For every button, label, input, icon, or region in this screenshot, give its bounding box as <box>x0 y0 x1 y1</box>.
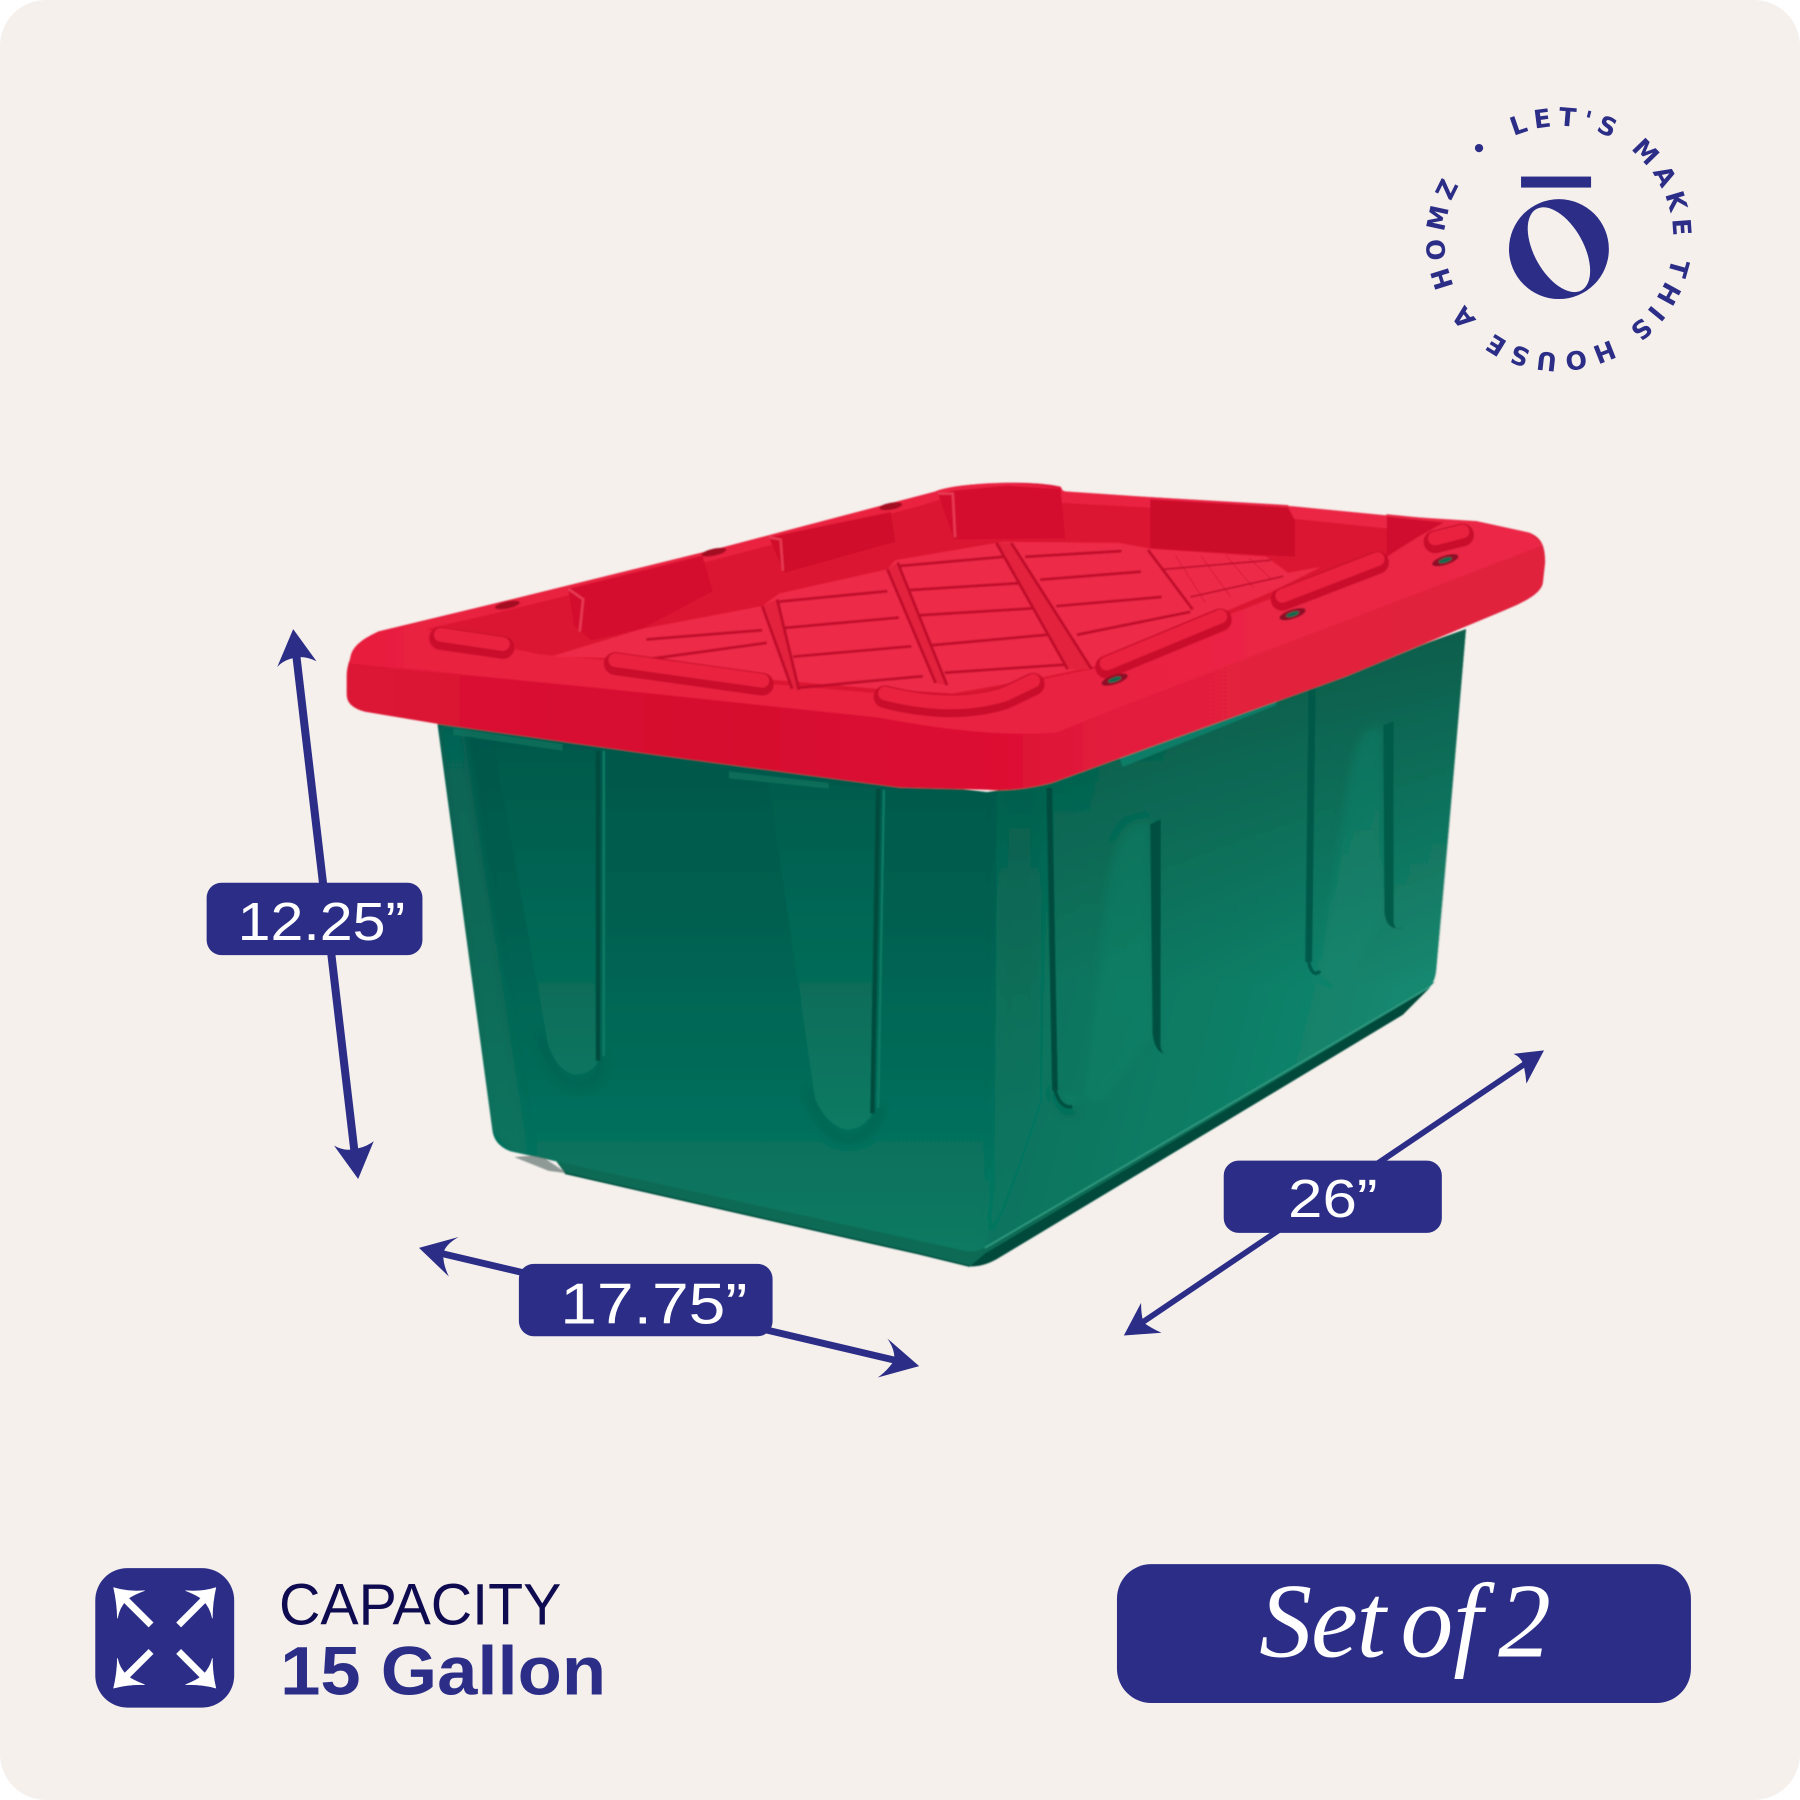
lid rim holes <box>494 501 1460 688</box>
height arrow <box>277 629 374 1179</box>
badge: set of 2: Set <box>1259 1563 1389 1680</box>
lid handles <box>441 532 1463 706</box>
rib: right face 2 <box>1320 726 1383 987</box>
badge: set of 2 <box>1117 1563 1691 1703</box>
logo mark: o with macron <box>1509 177 1609 302</box>
width label: 17.75” <box>560 1273 747 1337</box>
tote feet and floor shadow <box>514 982 1435 1266</box>
slot: right face 1 <box>1150 819 1164 1054</box>
badge: set of 2: of <box>1401 1563 1495 1680</box>
tray ribs and slats <box>642 543 1283 690</box>
rib shadow <box>540 1033 1077 1139</box>
logo ring text: LET'S MAKE THIS HOUSE A HOMZ <box>1426 107 1692 372</box>
body ribs <box>437 608 1492 1155</box>
height label: 12.25” <box>238 892 405 952</box>
logo badge <box>1426 107 1692 372</box>
top ledge tabs <box>453 728 562 751</box>
capacity block <box>95 1568 606 1709</box>
lid top rim <box>350 484 1543 734</box>
height dimension: 12.25 inches <box>207 629 422 1179</box>
width dimension: 17.75 inches <box>419 1237 919 1378</box>
icon: expand arrows <box>95 1568 234 1708</box>
red lid <box>347 483 1545 790</box>
green body <box>437 629 1466 1251</box>
rib: corner <box>1054 820 1151 1107</box>
tray channels <box>762 543 1092 690</box>
width label <box>519 1264 773 1337</box>
capacity value: 15 Gallon <box>280 1632 606 1709</box>
depth label: 26” <box>1288 1169 1378 1229</box>
lid raised wall tabs <box>568 486 1444 641</box>
rib: left front <box>538 976 598 1074</box>
depth arrow <box>1124 1050 1544 1336</box>
height label <box>207 883 422 955</box>
lid tray floor <box>551 542 1320 693</box>
lid silhouette and front lip <box>347 483 1545 790</box>
rib: center front <box>798 786 872 1130</box>
width arrow <box>419 1237 919 1378</box>
capacity label: CAPACITY <box>279 1572 561 1637</box>
badge: set of 2: 2 <box>1498 1563 1551 1680</box>
soft left edge sheen <box>437 723 528 1155</box>
depth dimension: 26 inches <box>1124 1050 1544 1336</box>
product: storage tote <box>347 483 1545 1266</box>
depth label <box>1224 1161 1442 1233</box>
lid recess walls <box>427 496 1423 700</box>
